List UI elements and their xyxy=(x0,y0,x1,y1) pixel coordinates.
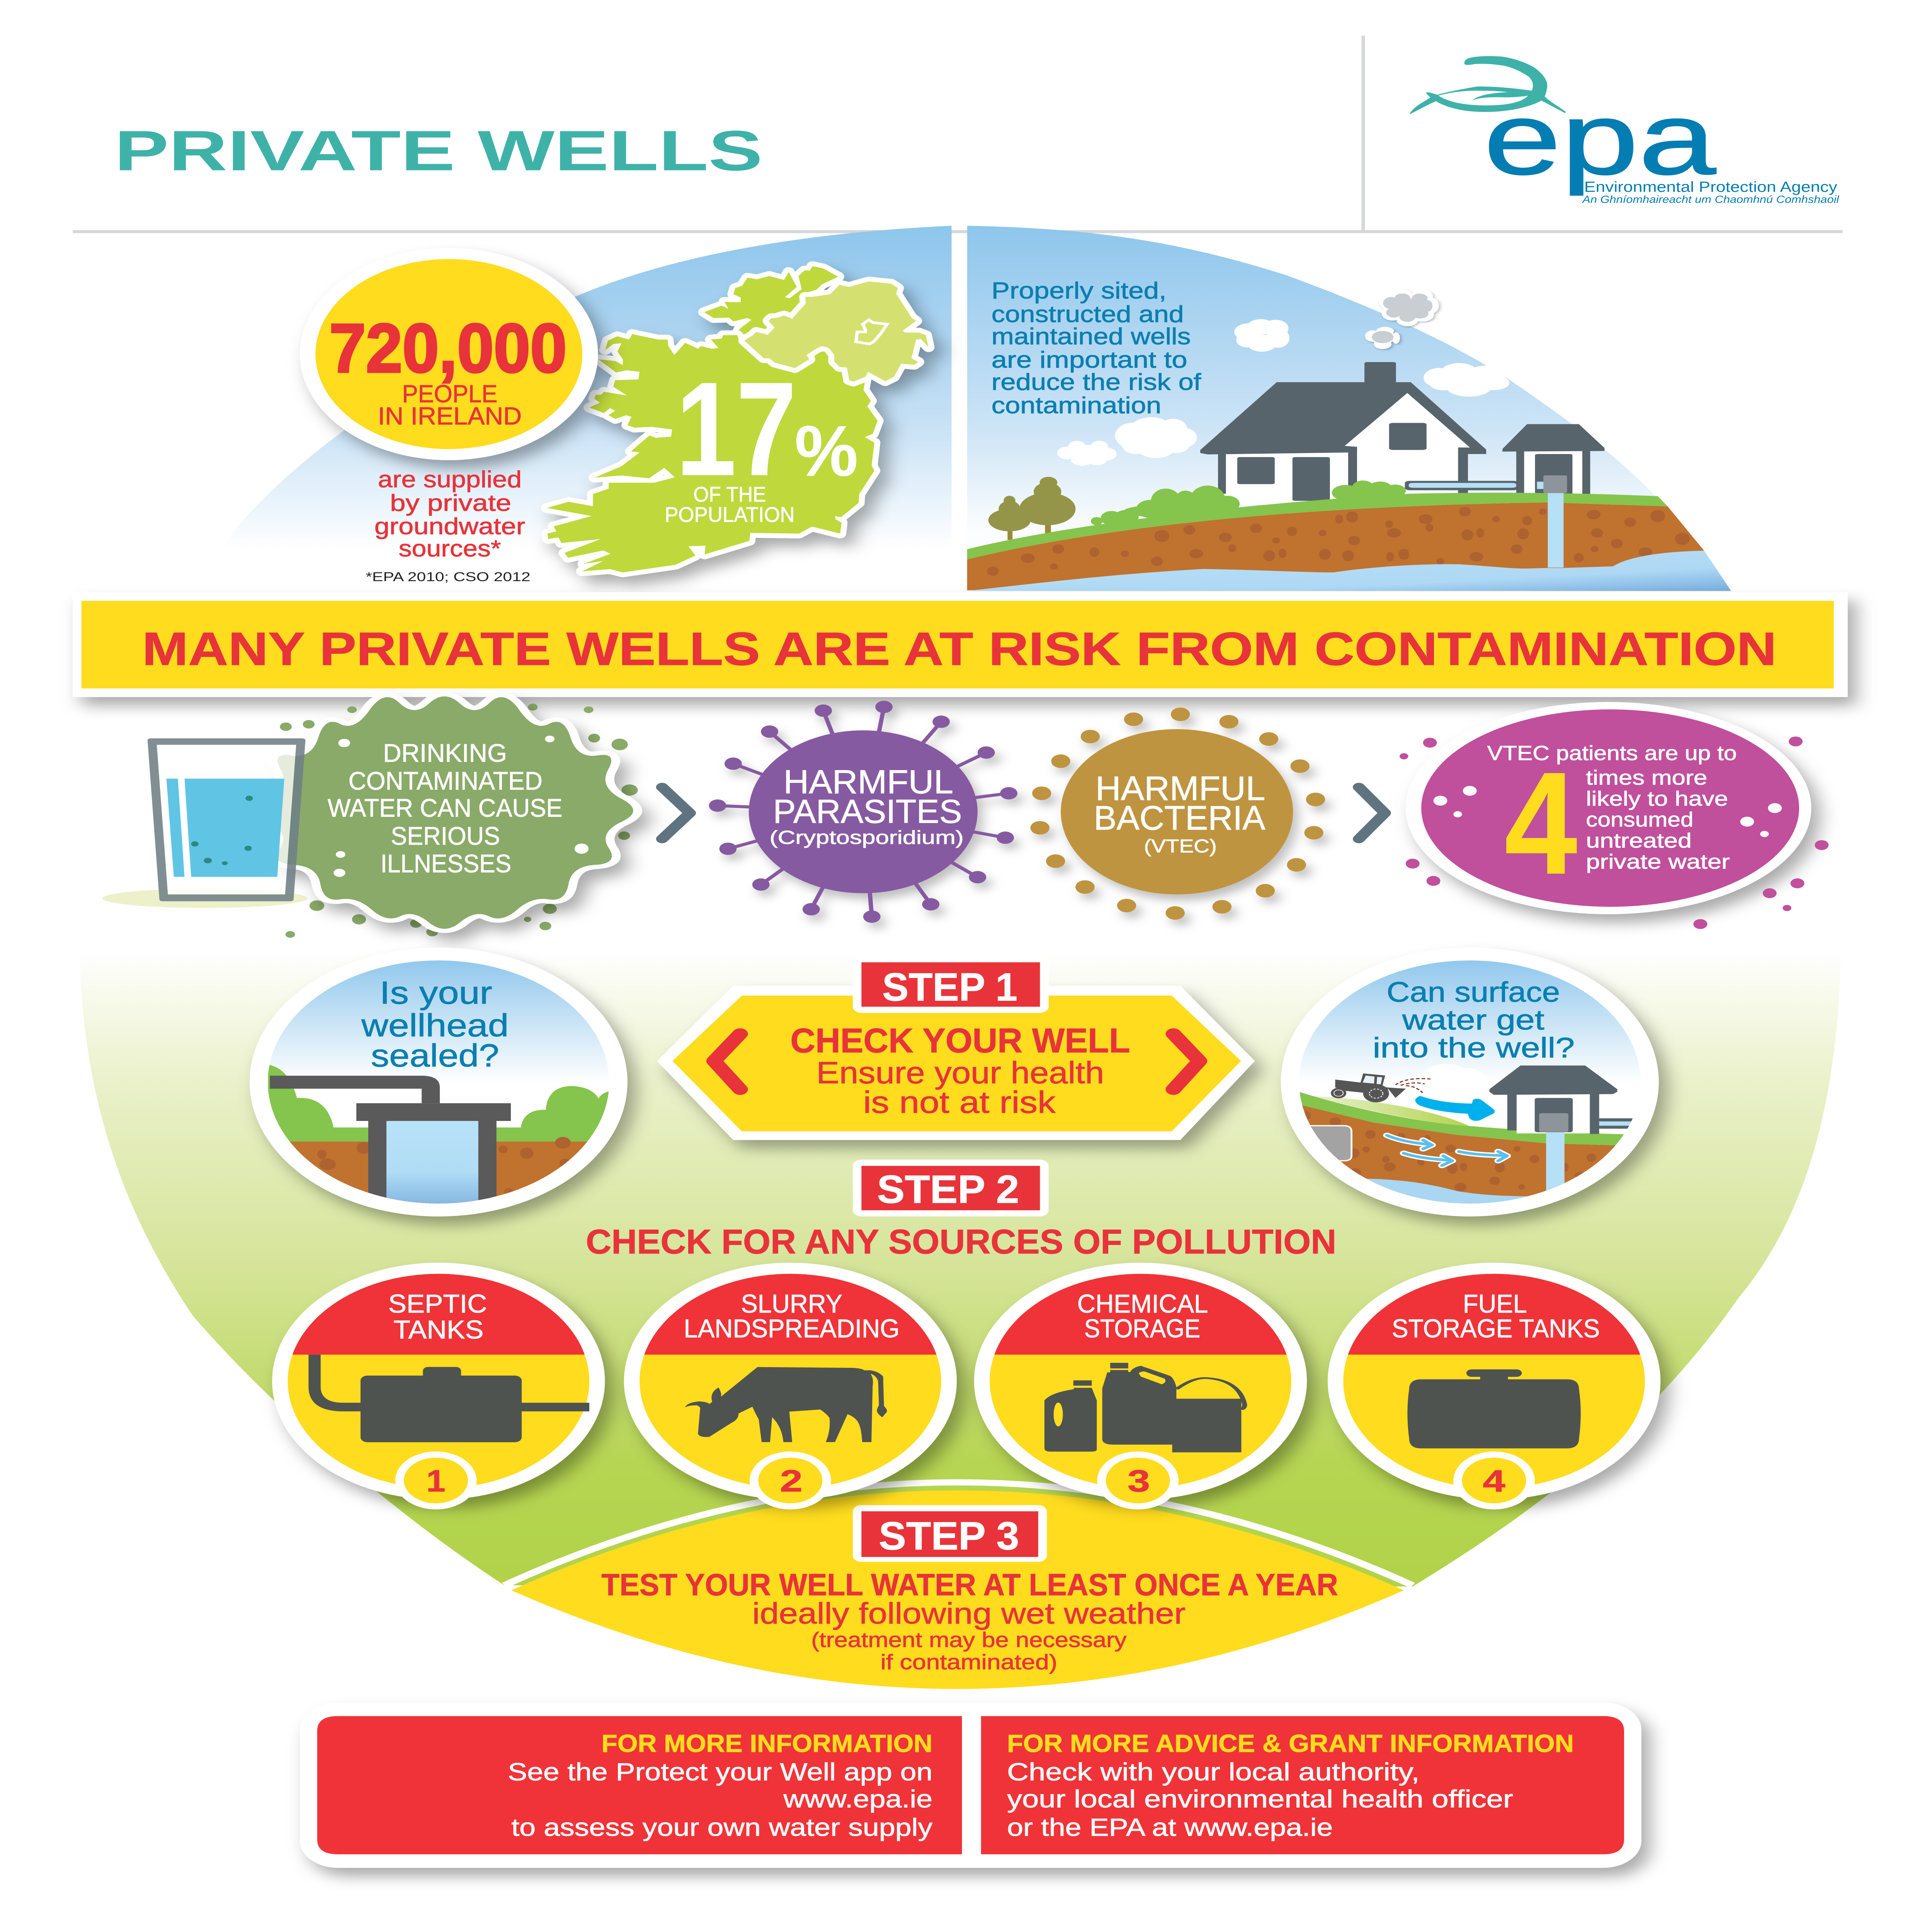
arrow: surface runoff xyxy=(1415,1096,1495,1121)
icon: bushes xyxy=(1091,480,1407,525)
icon: EPA logo: epa xyxy=(1484,82,1717,196)
text: properly sited wells: are important to xyxy=(992,347,1187,373)
text: supplied by private groundwater xyxy=(374,466,525,561)
17 percent: OF THE xyxy=(693,483,766,506)
source 1: septic tanks: TANKS xyxy=(393,1315,483,1344)
badge xyxy=(255,696,633,929)
parasites circle xyxy=(709,701,1017,923)
parasites circle: HARMFUL xyxy=(783,764,953,801)
splash dots xyxy=(280,704,638,938)
text: properly sited wells: maintained wells xyxy=(992,323,1191,349)
number bubble 1: 1 xyxy=(426,1464,446,1498)
icon: chemical containers xyxy=(1044,1363,1245,1452)
panel: advice and grant information xyxy=(981,1716,1624,1854)
icon: trees xyxy=(988,477,1075,540)
stat circle: 720,000 people xyxy=(300,248,598,460)
step 2 label xyxy=(853,1160,1049,1216)
17 percent: 17 xyxy=(676,355,796,503)
step 1 hexagon: CHECK YOUR WELL xyxy=(790,1021,1130,1060)
panel: more information: FOR MORE INFORMATION xyxy=(601,1730,932,1757)
source 2: slurry landspreading: SLURRY xyxy=(741,1289,842,1318)
stat circle: 720,000 people: PEOPLE xyxy=(402,380,497,408)
text: supplied by private groundwater: groundwater xyxy=(374,513,525,539)
text: drinking contaminated water: ILLNESSES xyxy=(381,849,511,878)
step 3 label xyxy=(853,1505,1047,1562)
panel: advice and grant information: your local environmental health officer xyxy=(1007,1786,1513,1813)
panel: more information: www.epa.ie xyxy=(783,1786,932,1813)
circle: is your wellhead sealed xyxy=(250,947,628,1216)
title: PRIVATE WELLS xyxy=(114,119,763,182)
panel: green bowl background xyxy=(80,955,1841,1587)
VTEC oval: times more xyxy=(1586,766,1707,789)
source 1: septic tanks: SEPTIC xyxy=(388,1289,487,1318)
panel: advice and grant information: Check with your local authority, xyxy=(1007,1759,1420,1786)
text: properly sited wells: contamination xyxy=(992,392,1161,418)
bacteria circle: (VTEC) xyxy=(1144,836,1217,857)
panel: more information: See the Protect your Well app on xyxy=(508,1759,932,1786)
circle: can surface water get in: into the well? xyxy=(1373,1032,1575,1063)
step 2 label: STEP 2 xyxy=(877,1167,1019,1211)
circle: can surface water get in: water get xyxy=(1402,1004,1544,1036)
circle: is your wellhead sealed: sealed? xyxy=(371,1038,499,1073)
VTEC oval: private water xyxy=(1586,850,1730,873)
step 1 label xyxy=(853,956,1049,1013)
text: drinking contaminated water: CONTAMINATED xyxy=(349,767,543,795)
step 3 dome: if contaminated) xyxy=(881,1651,1057,1674)
icon: EPA logo xyxy=(1410,56,1840,206)
text: supplied by private groundwater: by private xyxy=(390,490,511,516)
17 percent: % xyxy=(795,411,858,491)
icon: tractor xyxy=(1331,1073,1431,1102)
source 1: septic tanks xyxy=(272,1263,605,1509)
step 2 heading: CHECK FOR ANY SOURCES OF POLLUTION xyxy=(586,1223,1336,1261)
source 2: slurry landspreading: LANDSPREADING xyxy=(684,1314,900,1343)
text: supplied by private groundwater: are supplied xyxy=(378,466,522,492)
number bubble 4: 4 xyxy=(1483,1464,1505,1498)
number bubble 4 xyxy=(1453,1451,1535,1509)
icon: EPA logo: An Ghníomhaireacht um Chaomhnú Comhshaoil xyxy=(1582,194,1840,206)
source 3: chemical storage: STORAGE xyxy=(1084,1314,1200,1343)
parasites circle: PARASITES xyxy=(773,793,962,830)
circle: is your wellhead sealed: Is your xyxy=(379,975,492,1010)
step 1 label: STEP 1 xyxy=(882,965,1017,1009)
icon: cow xyxy=(685,1367,887,1442)
arrows: groundwater flow xyxy=(1387,1135,1507,1165)
step 3 dome xyxy=(504,1482,1413,1689)
step 3 dome: TEST YOUR WELL WATER AT LEAST ONCE A YEAR xyxy=(601,1567,1338,1602)
text: properly sited wells: reduce the risk of xyxy=(992,369,1201,395)
step 1 hexagon xyxy=(657,986,1255,1140)
icon: tank xyxy=(1301,1126,1352,1161)
icon: clouds xyxy=(1057,319,1509,466)
arrow: chevron to parasites xyxy=(662,787,690,839)
footer panel xyxy=(300,1702,1641,1868)
number 4: 4 xyxy=(1504,742,1578,905)
circle: can surface water get in: Can surface xyxy=(1386,976,1560,1008)
panel: advice and grant information: FOR MORE ADVICE & GRANT INFORMATION xyxy=(1007,1730,1574,1757)
17 percent: POPULATION xyxy=(665,503,795,527)
step 1 hexagon: is not at risk xyxy=(863,1085,1056,1119)
panel: more information: to assess your own water supply xyxy=(511,1814,932,1841)
text: properly sited wells xyxy=(992,277,1201,418)
panel: house and well cross-section xyxy=(967,226,1731,591)
number bubble 3: 3 xyxy=(1128,1464,1150,1498)
map of Ireland xyxy=(547,266,929,572)
source 4: fuel storage tanks: FUEL xyxy=(1463,1289,1527,1318)
glass shadow xyxy=(102,889,307,908)
stat circle: 720,000 people: 720,000 xyxy=(329,310,567,387)
text: drinking contaminated water: WATER CAN CAUSE xyxy=(328,794,563,822)
VTEC oval xyxy=(1400,702,1829,929)
number bubble 2 xyxy=(750,1451,831,1509)
panel: 720,000 people and Ireland map xyxy=(225,226,952,584)
icon: house xyxy=(1200,362,1486,505)
text: drinking contaminated water: DRINKING xyxy=(383,739,507,767)
arrow: chevron to VTEC xyxy=(1359,787,1385,839)
bacteria circle xyxy=(1031,707,1325,920)
icon: septic tank xyxy=(308,1355,589,1442)
icon: well hut xyxy=(1490,1066,1633,1196)
source 3: chemical storage: CHEMICAL xyxy=(1077,1289,1208,1318)
source 3: chemical storage xyxy=(974,1263,1307,1509)
illness starburst and glass xyxy=(102,696,638,938)
icon: fuel tank xyxy=(1407,1369,1581,1448)
panel: advice and grant information: or the EPA at www.epa.ie xyxy=(1007,1814,1333,1841)
number bubble 2: 2 xyxy=(780,1464,803,1498)
banner: many private wells at risk xyxy=(73,592,1848,697)
arrow: left chevron xyxy=(714,1034,740,1089)
scene drawing xyxy=(967,290,1731,591)
VTEC oval: VTEC patients are up to xyxy=(1487,742,1737,764)
parasites circle: (Cryptosporidium) xyxy=(770,827,964,848)
arrow: right chevron xyxy=(1174,1034,1199,1089)
source 4: fuel storage tanks: STORAGE TANKS xyxy=(1392,1314,1600,1343)
ground cross-section xyxy=(967,493,1731,591)
VTEC oval: likely to have xyxy=(1586,787,1728,810)
source 2: slurry landspreading xyxy=(624,1263,957,1509)
VTEC oval: untreated xyxy=(1586,829,1692,852)
VTEC oval: consumed xyxy=(1586,808,1693,831)
header xyxy=(73,36,1842,233)
number bubble 1 xyxy=(395,1451,477,1509)
stat circle: 720,000 people: IN IRELAND xyxy=(378,403,522,430)
circle: is your wellhead sealed: wellhead xyxy=(361,1007,509,1043)
panel: more information xyxy=(317,1716,962,1854)
icon: chimney smoke xyxy=(1365,290,1439,349)
icon: glass of water xyxy=(148,738,305,901)
bacteria circle: BACTERIA xyxy=(1094,799,1266,837)
source note: *EPA 2010; CSO 2012 xyxy=(366,569,531,584)
bacteria circle: HARMFUL xyxy=(1095,769,1265,807)
text: properly sited wells: constructed and xyxy=(992,301,1184,327)
source 4: fuel storage tanks xyxy=(1328,1263,1660,1509)
text: drinking contaminated water: SERIOUS xyxy=(391,822,500,850)
step 3 label: STEP 3 xyxy=(879,1514,1019,1558)
step 3 dome: (treatment may be necessary xyxy=(811,1628,1127,1652)
circle: can surface water get in xyxy=(1281,947,1659,1216)
icon: EPA logo: Environmental Protection Agency xyxy=(1584,179,1837,195)
icon: well hut xyxy=(1405,424,1604,495)
text: drinking contaminated water xyxy=(328,739,563,878)
text: properly sited wells: Properly sited, xyxy=(992,277,1167,304)
step 1 hexagon: Ensure your health xyxy=(816,1055,1104,1090)
icon: well shaft xyxy=(1543,475,1567,568)
number bubble 3 xyxy=(1097,1451,1179,1509)
text: supplied by private groundwater: sources* xyxy=(399,535,501,561)
step 3 dome: ideally following wet weather xyxy=(752,1597,1186,1630)
